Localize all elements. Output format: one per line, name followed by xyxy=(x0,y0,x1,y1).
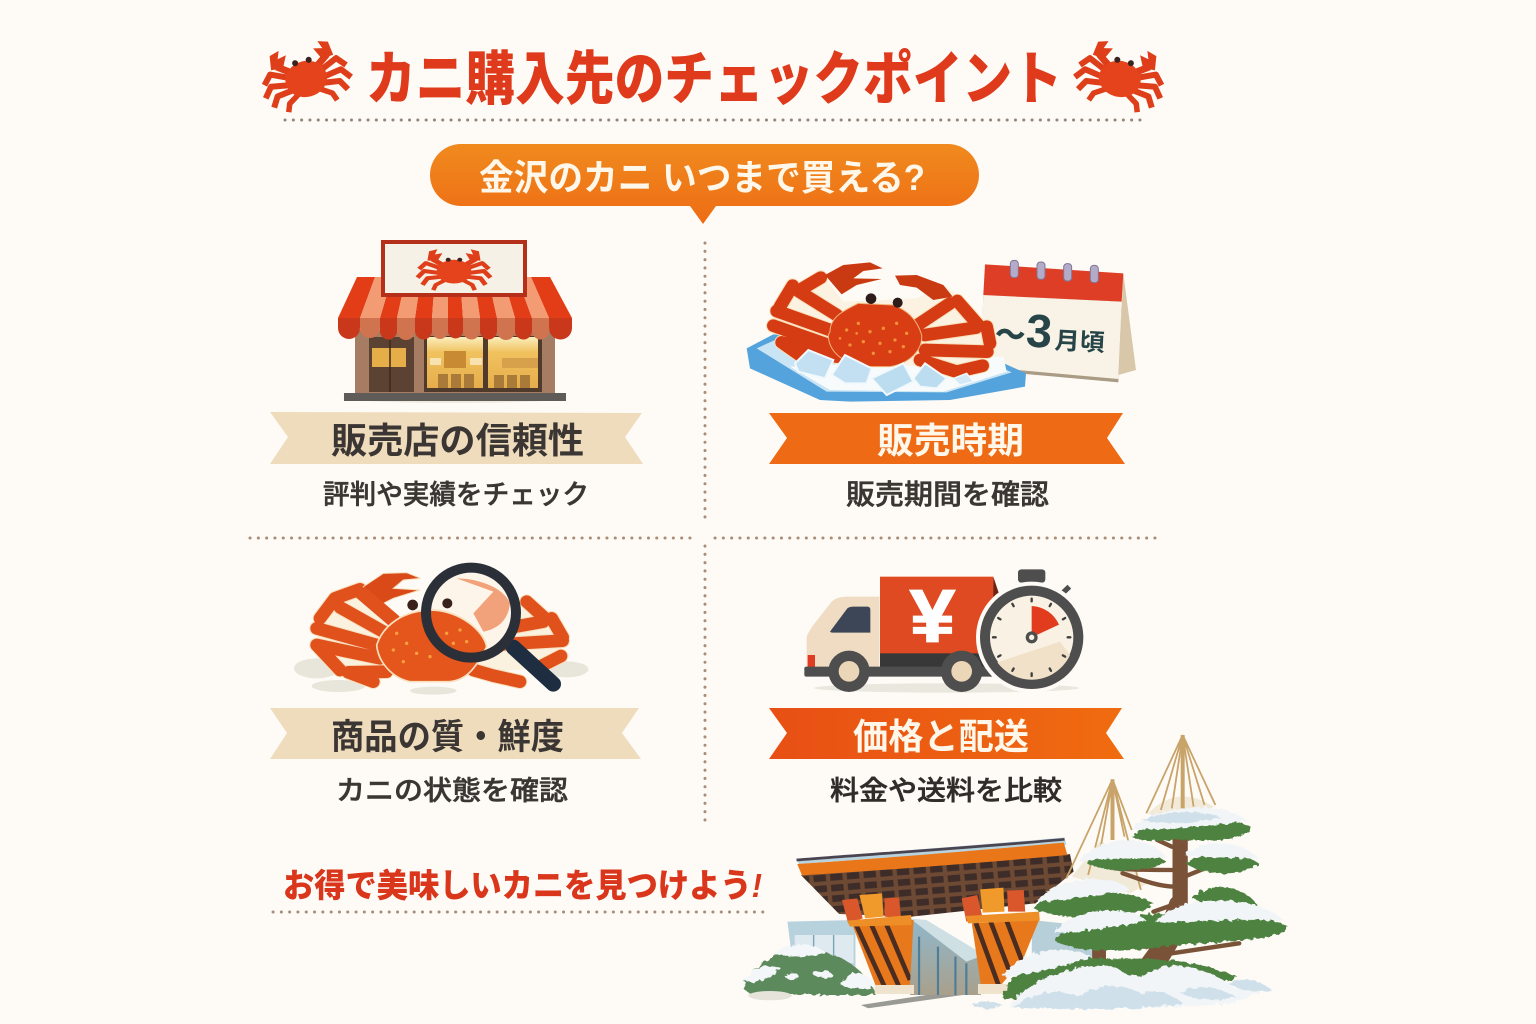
caption: shop reliability: 評判や実績をチェック xyxy=(323,480,589,510)
question banner xyxy=(430,144,979,224)
caption: price and delivery: 料金や送料を比較 xyxy=(830,776,1062,806)
illustration: Kanazawa Tsuzumi gate and snowy pine xyxy=(743,735,1288,1009)
icon: crab shop xyxy=(338,242,572,403)
icon: calendar xyxy=(981,260,1136,382)
icon: truck xyxy=(804,575,1000,692)
ribbon: sales period: 販売時期 xyxy=(877,420,1024,461)
icon: yukitsuri rope supports xyxy=(1066,735,1215,893)
icon: truck: ¥ xyxy=(910,575,955,658)
ribbon: quality and freshness xyxy=(270,708,641,759)
icon: crab on ice with calendar xyxy=(747,260,1136,402)
icon: snow shading xyxy=(972,812,1272,1009)
question banner: 金沢のカニ いつまで買える? xyxy=(479,157,925,198)
icon: magnifying glass xyxy=(421,562,561,692)
ribbon: sales period xyxy=(769,413,1125,464)
icon: stopwatch xyxy=(976,569,1087,693)
title crab left xyxy=(255,35,356,117)
panel: price and delivery xyxy=(769,569,1124,806)
icon: left snowy shrub xyxy=(743,945,963,1008)
icon: pine foliage xyxy=(1003,818,1288,999)
ribbon: quality and freshness: 商品の質・鮮度 xyxy=(331,718,564,757)
caption: sales period: 販売期間を確認 xyxy=(846,479,1049,510)
title: カニ購入先のチェックポイント xyxy=(366,47,1062,112)
icon: snow on pine xyxy=(1003,807,1284,1009)
title crab right xyxy=(1070,35,1171,117)
icon: crab under magnifier xyxy=(294,568,588,695)
closing message: お得で美味しいカニを見つけよう! xyxy=(283,867,762,904)
infographic canvas xyxy=(248,41,1288,1010)
icon: pine trunk and branches xyxy=(1079,833,1239,973)
ribbon: shop reliability xyxy=(270,412,643,464)
ribbon: shop reliability: 販売店の信頼性 xyxy=(331,420,584,461)
panel: quality and freshness xyxy=(270,568,641,806)
panel: sales period xyxy=(747,260,1136,510)
icon: calendar: 月頃 xyxy=(1054,328,1105,357)
icon: snow crab xyxy=(773,262,990,395)
panel: shop reliability xyxy=(270,242,643,510)
ribbon: price and delivery xyxy=(769,708,1124,759)
ribbon: price and delivery: 価格と配送 xyxy=(853,716,1029,757)
icon: background buildings xyxy=(787,918,1094,995)
icon: Tsuzumi gate xyxy=(797,837,1074,994)
icon: calendar: 3 xyxy=(1025,304,1053,358)
icon: calendar: ～ xyxy=(994,318,1026,353)
caption: quality and freshness: カニの状態を確認 xyxy=(336,776,568,806)
icon: ice tray xyxy=(747,334,1026,402)
icon: delivery truck with stopwatch xyxy=(804,569,1087,693)
